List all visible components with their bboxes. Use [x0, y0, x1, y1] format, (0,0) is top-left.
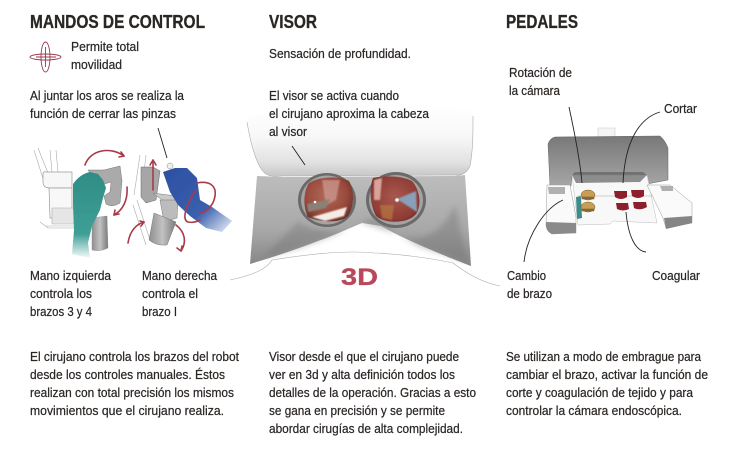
text: pedales description	[506, 349, 708, 418]
text: movilidad	[71, 39, 139, 72]
icon: red pedals	[614, 190, 647, 210]
text: activación	[269, 88, 430, 139]
left eyepiece	[298, 173, 356, 227]
text: visor description: Visor desde el que el cirujano puede	[269, 349, 459, 364]
icon: right hand arrows	[128, 160, 215, 251]
text: mandos description: realizan con total precisión los mismos	[30, 385, 234, 400]
text: mano derecha: controla el	[142, 286, 198, 301]
text: aros: función de cerrar las pinzas	[30, 106, 176, 121]
label: rotación: la cámara	[509, 83, 561, 98]
label: rotación	[509, 65, 572, 98]
label: rotación: Rotación de	[509, 65, 572, 80]
icon: left hand arrows	[85, 150, 127, 215]
text: mano derecha: Mano derecha	[142, 268, 218, 283]
body outline	[230, 252, 500, 286]
arrow: cortar leader	[623, 112, 660, 183]
heading: PEDALES	[506, 12, 578, 32]
text: visor description: detalles de la operación. Gracias a esto	[269, 385, 476, 400]
text: movilidad: movilidad	[71, 57, 122, 72]
text: mandos description: desde los controles manuales. Éstos	[30, 367, 225, 382]
text: pedales description: cambiar el brazo, activar la función de	[506, 367, 708, 382]
text: visor description: se gana en precisión y se permite	[269, 403, 445, 418]
text: visor description	[269, 349, 476, 436]
label: cambio	[507, 268, 552, 301]
arrow: visor leader	[292, 146, 305, 165]
3D label: 3D	[341, 264, 378, 291]
heading: MANDOS DE CONTROL	[30, 12, 205, 32]
arrow: pinzas leader	[158, 128, 167, 158]
text: aros	[30, 88, 185, 121]
text: activación: el cirujano aproxima la cabeza	[269, 106, 430, 121]
label: coagular: Coagular	[652, 268, 701, 283]
text: profundidad: Sensación de profundidad.	[269, 46, 411, 61]
illustration: pedal unit	[546, 128, 692, 234]
text: visor description: abordar cirugías de alta complejidad.	[269, 421, 463, 436]
text: mano izquierda: controla los	[30, 286, 92, 301]
text: mano izquierda: Mano izquierda	[30, 268, 112, 283]
text: mano izquierda	[30, 268, 112, 319]
arrow: rotación leader	[569, 107, 582, 183]
arrow: coagular leader	[626, 212, 646, 252]
text: aros: Al juntar los aros se realiza la	[30, 88, 185, 103]
label: cambio: Cambio	[507, 268, 546, 283]
illustration: surgeon console viewer	[230, 104, 500, 291]
arrow: cambio leader	[524, 200, 563, 262]
text: activación: El visor se activa cuando	[269, 88, 399, 103]
text: mano derecha	[142, 268, 218, 319]
illustration: right hand on control	[133, 155, 232, 245]
text: visor description: ver en 3d y alta definición todos los	[269, 367, 455, 382]
heading: VISOR	[269, 12, 317, 32]
icon: camera pedals	[581, 190, 595, 212]
text: mandos description	[30, 349, 239, 418]
right eyepiece	[366, 172, 426, 228]
text: pedales description: Se utilizan a modo de embrague para	[506, 349, 702, 364]
text: mano derecha: brazo I	[142, 304, 177, 319]
viewer mask	[250, 175, 471, 266]
label: cortar: Cortar	[664, 101, 698, 116]
text: mano izquierda: brazos 3 y 4	[30, 304, 92, 319]
label: cambio: de brazo	[507, 286, 552, 301]
panel: mandos de control	[30, 12, 239, 418]
text: pedales description: corte y coagulación de tejido y para	[506, 385, 694, 400]
panel: visor	[269, 12, 476, 436]
text: movilidad: Permite total	[71, 39, 139, 54]
text: mandos description: El cirujano controla los brazos del robot	[30, 349, 239, 364]
head rest	[247, 104, 473, 176]
icon: rotation cross	[30, 42, 61, 72]
text: mandos description: movimientos que el cirujano realiza.	[30, 403, 224, 418]
illustration: left hand on control	[34, 148, 122, 258]
text: activación: al visor	[269, 124, 308, 139]
text: pedales description: controlar la cámara endoscópica.	[506, 403, 682, 418]
panel: pedales	[506, 12, 708, 418]
